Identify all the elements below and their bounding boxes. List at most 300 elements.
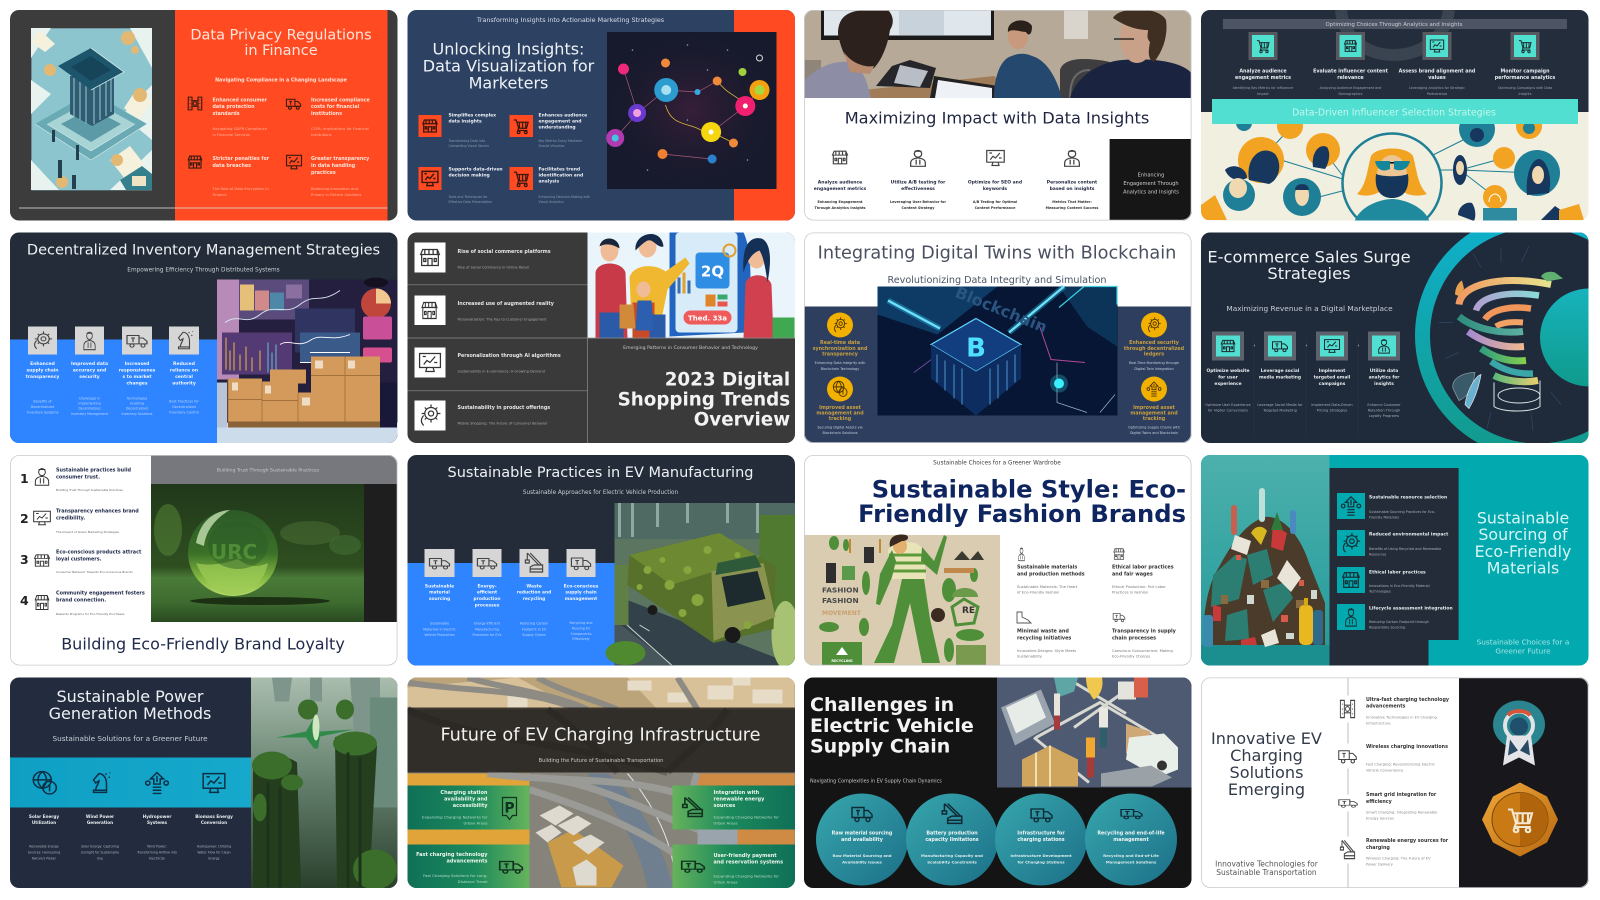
illustration: blockchain cube: B <box>966 334 986 364</box>
item: materials: Sustainable Materials: The Heart <box>1017 585 1078 589</box>
item: solar: Sources: Harnessing <box>28 850 60 854</box>
item: supply chain <box>1112 614 1177 658</box>
item: wireless: Vehicle Convenience <box>1366 768 1404 772</box>
item: waste reduction: reduction and <box>517 590 551 596</box>
item: lifecycle: Lifecycle assessment integration <box>1369 606 1453 612</box>
item: data-driven decision: Supports data-driven <box>448 166 503 172</box>
item: solar: Utilization <box>32 820 56 825</box>
title: Data-Driven Influencer Selection Strategies <box>1292 107 1496 118</box>
item: hydropower: Electricity <box>149 856 165 860</box>
item: infrastructure <box>995 794 1087 886</box>
item: energy efficient: processes <box>475 602 500 608</box>
item: wireless: Wireless charging innovations <box>1366 744 1448 750</box>
item 1: Sustainable practices build <box>56 468 131 474</box>
illustration: eco fashion: MOVEMENT <box>822 610 862 617</box>
item: responsiveness: s to market <box>122 374 152 380</box>
panel: blue band <box>10 758 251 808</box>
item: recycling: Recycling and end-of-life <box>1097 830 1165 836</box>
card: Data Privacy Regulations in Finance <box>10 10 398 220</box>
illustration: isometric bank <box>31 28 152 190</box>
item: smart grid: Smart Charging: Integrating Renewable <box>1366 810 1438 814</box>
item: energy efficient <box>472 549 502 637</box>
item: analyze: Enhancing Engagement <box>817 200 863 204</box>
item: asset management right: tracking <box>1143 416 1166 422</box>
item: material sourcing: sourcing <box>429 596 450 602</box>
item: trends: Facilitates trend <box>538 166 580 172</box>
item: reliance: reliance on <box>170 368 198 374</box>
item: audience engagement: understanding <box>538 125 576 131</box>
row dividers <box>408 285 795 391</box>
card border <box>804 455 1191 665</box>
title: Data Privacy Regulations <box>190 28 372 44</box>
item: environmental impact: Resources <box>1369 552 1387 556</box>
item: trends <box>510 166 590 204</box>
item 3: 3 <box>20 552 29 567</box>
item: recycling: Management Solutions <box>1106 860 1157 864</box>
title: Supply Chain <box>810 736 950 758</box>
item: payment <box>672 844 795 888</box>
item: A/B testing: Utilize A/B testing for <box>891 180 946 186</box>
item: SEO: Optimize for SEO and <box>968 180 1022 186</box>
item: social media: Leverage social <box>1261 368 1300 374</box>
item: renewable integration: Urban Areas <box>714 820 737 826</box>
panel: orange strip <box>734 10 795 220</box>
title: Maximizing Impact with Data Insights <box>845 108 1149 128</box>
item: compliance costs: CCPA: Implications for Financial <box>311 127 369 131</box>
item: biomass: Hydropower: Utilizing <box>197 844 231 848</box>
card: Future of EV Charging <box>408 678 795 888</box>
item: consumer data protection: Enhanced consumer <box>212 98 268 104</box>
item: A/B testing: Content Strategy <box>902 206 935 210</box>
item: smart grid: Energy Sources <box>1366 816 1394 820</box>
item: email campaigns: campaigns <box>1319 381 1346 387</box>
illustration: funnel <box>1439 246 1563 430</box>
illustration: eco fashion: RECYCLING <box>831 659 853 663</box>
item 1: Building Trust Through Sustainable Practices <box>56 488 123 492</box>
item: AI personalization: Personalization through AI algorithms <box>458 353 561 359</box>
item: renewable integration <box>672 786 795 830</box>
title: Electric Vehicle <box>810 715 974 737</box>
panel: navy <box>804 306 1192 443</box>
item: material sourcing: Sustainable <box>430 622 449 626</box>
item: labor: Technologies <box>1368 590 1391 594</box>
item: supply chain: Eco-Friendly Choices <box>1112 654 1150 658</box>
title: Sustainable Practices in EV Manufacturing <box>448 465 753 481</box>
item: content relevance: Analyzing Audience Engagement and <box>1320 86 1381 90</box>
item: reliance: Decentralized <box>172 405 196 409</box>
item 4: Community engagement fosters <box>56 590 145 596</box>
title: Strategies <box>1267 264 1351 283</box>
item: augmented reality: Personalization: The Key to Customer Engagement <box>458 318 547 322</box>
title: Emerging <box>1228 780 1305 799</box>
item: supply chain: Transparency in supply <box>1112 628 1177 634</box>
subtitle: Building the Future of Sustainable Transportation <box>539 758 663 764</box>
item: supply chain: chain processes <box>1112 636 1156 642</box>
subtitle: Optimizing Choices Through Analytics and Insights <box>1326 22 1463 28</box>
item: station availability: accessibility <box>453 803 488 809</box>
title: Innovative EV <box>1211 729 1322 748</box>
item: labor: Practices in Fashion <box>1112 590 1149 594</box>
title: Building Eco-Friendly Brand Loyalty <box>61 634 345 654</box>
item: simplifies: Transforming Data into <box>448 139 485 143</box>
item: accuracy <box>71 326 109 416</box>
item: waste: recycling initiatives <box>1017 636 1071 642</box>
dark title band <box>408 708 795 772</box>
title: Sustainable Style: Eco- <box>872 476 1186 504</box>
item: social media: media marketing <box>1259 374 1301 380</box>
item: A/B testing <box>890 150 946 210</box>
item: engagement metrics: Impact <box>1257 92 1269 96</box>
item: ultra-fast: Infrastructure <box>1366 722 1391 726</box>
item: optimize website: Optimize website <box>1206 368 1250 374</box>
item: payment: Expanding Charging Networks for <box>714 874 779 878</box>
item: personalize <box>1046 150 1098 210</box>
item: responsiveness: Decentralized <box>126 406 148 410</box>
title: Materials <box>1487 558 1559 578</box>
item: AI personalization <box>414 348 561 378</box>
title: Generation Methods <box>49 704 211 723</box>
subtitle: Building Trust Through Sustainable Practices <box>217 468 320 474</box>
item: responsiveness <box>119 326 156 416</box>
item: reliance: Best Practices for <box>169 400 199 404</box>
item: content relevance: Evaluate influencer content <box>1313 69 1389 75</box>
subtitle: Sustainable Solutions for a Greener Future <box>52 734 208 743</box>
illustration: eco fashion: FASHION <box>822 596 859 605</box>
icon: ribbon medal <box>1493 700 1545 766</box>
item: infrastructure: Infrastructure Development <box>1010 853 1072 858</box>
item: consumer data protection: Navigating GDPR Compliance <box>212 127 268 131</box>
item: analyze <box>814 151 867 210</box>
item: materials: Sustainable materials <box>1017 564 1077 570</box>
item: greater transparency: in data handling <box>311 163 356 169</box>
illustration: data network <box>606 32 776 189</box>
separators <box>1254 338 1358 438</box>
item: engagement metrics: Analyze audience <box>1239 69 1287 75</box>
item: renewable: Power Delivery <box>1366 862 1394 866</box>
item: email campaigns: Implement Data-Driven <box>1311 403 1353 407</box>
card: Innovative EV Charging Solutions <box>1201 678 1588 888</box>
item: data analytics: Utilize data <box>1370 368 1398 374</box>
item: optimize website: for user <box>1218 374 1239 380</box>
item 2: The Impact of Green Marketing Strategies <box>55 530 119 534</box>
item: station availability: Charging station <box>440 790 488 796</box>
item: sustainability: Sustainability in product offerings <box>458 405 550 411</box>
item: A/B testing: Leveraging User Behavior for <box>890 200 946 204</box>
subtitle: Navigating Complexities in EV Supply Chain Dynamics <box>810 778 942 784</box>
item: waste reduction: recycling <box>523 596 545 602</box>
item: stricter penalties: The Role of Data Encryption in <box>212 187 269 191</box>
item: renewable: Wireless Charging: The Future of EV <box>1366 856 1431 860</box>
item: wireless: Fast Charging: Revolutionizing Electric <box>1366 762 1435 766</box>
title: Challenges in <box>810 694 954 716</box>
item: waste reduction: Supply Chains <box>522 633 546 637</box>
subtitle: Sustainable Transportation <box>1216 868 1317 877</box>
item: social media: Targeted Marketing <box>1262 408 1297 412</box>
callout text: Enhancing <box>1138 172 1164 178</box>
item: labor: Ethical Production: Fair Labor <box>1112 585 1166 589</box>
card: Sustainable Power Generation <box>10 678 398 890</box>
item: real-time data: Enhancing Data Integrity with <box>815 361 865 365</box>
title: 2023 Digital <box>665 370 790 390</box>
item: material sourcing: Materials in Electric <box>423 628 456 632</box>
subtitle: Greener Future <box>1495 646 1551 656</box>
subtitle: Transforming Insights into Actionable Marketing Strategies <box>476 16 665 24</box>
item: trends: identification and <box>538 172 583 178</box>
item: station availability: Expanding Charging Networks for <box>422 814 488 820</box>
card: Sustainable Practices in EV Manufacturing <box>408 455 800 669</box>
item: wireless <box>1336 744 1448 772</box>
illustration: family shopping: Thed. 33a <box>688 314 727 322</box>
item: environmental impact: Reduced environmental impact <box>1369 532 1449 538</box>
item: campaign analytics <box>1495 32 1555 96</box>
item: biomass: Energy <box>208 856 220 860</box>
item: stricter penalties <box>188 156 270 197</box>
item: greater transparency: Balancing Innovation and <box>311 187 358 191</box>
decorative-line label: footer rule <box>19 208 388 209</box>
item: smart grid: efficiency <box>1366 799 1393 805</box>
item: social commerce: Rise of social commerce platforms <box>458 249 551 255</box>
item: engagement metrics <box>1233 32 1294 96</box>
item: supply chain: management <box>565 596 597 602</box>
illustration: isometric logistics <box>997 678 1192 788</box>
item: trends: analysis <box>538 178 559 184</box>
item: transparency: transparency <box>26 374 59 380</box>
item: enhanced security: Real-Time Monitoring through <box>1129 361 1179 365</box>
item: payment: Urban Areas <box>714 880 737 884</box>
panel: dark list <box>1330 468 1459 666</box>
vertical line <box>1347 678 1349 888</box>
subtitle: Innovative Technologies for <box>1215 860 1319 868</box>
item: biomass: Water Flow for Clean <box>197 850 231 854</box>
item: waste <box>1017 612 1076 658</box>
item: transparency: supply chain <box>26 368 59 374</box>
card: E-commerce Sales Surge <box>1201 220 1600 451</box>
item: A/B testing: effectiveness <box>901 186 935 192</box>
card: Decentralized Inventory Management <box>10 232 398 443</box>
title: Charging <box>1230 746 1303 765</box>
title: Shopping Trends <box>618 390 790 410</box>
item: trends: Enhancing Decision-Making with <box>538 195 590 199</box>
item: fast charging: Distance Travel <box>458 879 488 884</box>
item: trends: Visual Analytics <box>538 200 564 204</box>
item 4: Rewards Programs for Eco-Friendly Purchases <box>56 612 125 616</box>
photo: highways aerial <box>408 678 795 888</box>
item: wind <box>81 773 119 860</box>
item 2: Transparency enhances brand <box>56 508 139 514</box>
subtitle: Maximizing Revenue in a Digital Marketplace <box>1226 304 1393 313</box>
item: hydropower: Systems <box>147 820 167 825</box>
item: content relevance <box>1313 32 1389 96</box>
item: optimize website: Optimize User Experience <box>1205 403 1251 407</box>
item: optimize website: experience <box>1214 381 1242 387</box>
item: responsiveness: responsivenes <box>119 368 156 374</box>
photo: forest city <box>251 678 398 890</box>
item: data analytics <box>1367 332 1401 418</box>
item: hydropower: Transforming Airflow into <box>136 850 177 854</box>
item: SEO: A/B Testing for Optimal <box>973 200 1017 204</box>
ring arc <box>1422 220 1600 451</box>
item: transparency: Decentralized <box>31 405 54 409</box>
subtitle: Revolutionizing Data Integrity and Simulation <box>887 275 1107 286</box>
item: engagement metrics: Identifying Key Metrics for Influencer <box>1233 86 1294 90</box>
item: greater transparency: Privacy in Fintech Solutions <box>311 193 362 197</box>
item: asset management left: Securing Digital Assets via <box>817 426 863 430</box>
item: energy efficient: Processes for EVs <box>473 633 502 637</box>
item: email campaigns <box>1311 332 1353 412</box>
item: resource selection: Sustainable Sourcing Practices for Eco- <box>1369 510 1436 514</box>
item: energy efficient: Manufacturing <box>475 628 499 632</box>
item: supply chain: Eco-conscious <box>564 584 599 590</box>
item: hydropower: Wind Power: <box>147 844 167 848</box>
item: renewable integration: Expanding Charging Networks for <box>714 814 779 820</box>
card: Sustainable Style <box>804 455 1192 666</box>
item: waste: Innovative Designs: Style Meets <box>1017 649 1076 653</box>
card: Unlocking Insights <box>408 10 795 220</box>
item 3: Consumer Behavior Towards Eco-Conscious Brands <box>56 570 133 574</box>
item 2 <box>20 508 139 534</box>
item: responsiveness: Increased <box>125 361 149 367</box>
item: reliance: Reduced <box>173 361 195 367</box>
item: data analytics: Enhance Customer <box>1367 403 1401 407</box>
item 4: 4 <box>20 593 29 608</box>
callout text: Analytics and Insights <box>1123 190 1179 196</box>
item: fast charging: Fast charging technology <box>416 852 488 858</box>
item: enhanced security: ledgers <box>1144 352 1164 358</box>
photo: green van <box>606 503 800 669</box>
item: supply chain: Recycling and <box>569 621 593 625</box>
item: supply chain: Conscious Consumerism: Making <box>1112 649 1173 653</box>
item: consumer data protection: standards <box>212 111 240 117</box>
item: brand alignment: Partnerships <box>1427 92 1448 96</box>
item: supply chain: Reusing EV <box>572 626 591 630</box>
item: asset management right: management and <box>1130 410 1178 416</box>
item: environmental impact <box>1337 530 1449 556</box>
item: waste: Sustainability <box>1017 654 1043 658</box>
item: ultra-fast: advancements <box>1366 704 1406 710</box>
top bar <box>151 455 398 484</box>
illustration: family shopping: 2Q <box>701 262 724 280</box>
item: asset management left: tracking <box>829 416 852 422</box>
card: Data-Driven Influencer Selection <box>1201 10 1588 232</box>
panel: dark header <box>1201 10 1588 112</box>
subtitle: Sustainable Approaches for Electric Vehicle Production <box>523 490 679 496</box>
item: brand alignment: Leveraging Analytics for Strategic <box>1409 86 1465 90</box>
item: asset management left: Improved asset <box>819 405 862 411</box>
item: energy efficient: Energy-Efficient <box>474 622 501 626</box>
item: compliance costs <box>286 98 370 137</box>
item 1: consumer trust. <box>56 474 100 480</box>
item: data analytics: analytics for <box>1369 374 1400 380</box>
item: campaign analytics: Insights <box>1519 92 1532 96</box>
item: solar: Renewable Energy <box>29 844 59 848</box>
card border <box>10 455 397 665</box>
item: material sourcing: Sustainable <box>425 584 454 590</box>
item: accuracy: Improved data <box>71 361 108 367</box>
item: reliance: authority <box>172 380 196 386</box>
item: simplifies: data insights <box>448 119 482 125</box>
item: battery capacity <box>906 794 998 886</box>
panel: orange content <box>175 10 388 220</box>
item: resource selection <box>1337 493 1447 520</box>
item: material sourcing: material <box>429 590 450 596</box>
item: biomass: Conversion <box>201 820 227 825</box>
item: resource selection: Friendly Materials <box>1369 516 1399 520</box>
item: ultra-fast <box>1336 696 1450 726</box>
item: payment: and reservation systems <box>714 860 783 866</box>
subtitle: Sustainable Choices for a Greener Wardrobe <box>933 461 1061 467</box>
title: Sustainable <box>1477 508 1569 528</box>
title: Sustainable Power <box>56 687 204 706</box>
item: station availability: Urban Areas <box>464 820 488 826</box>
item: accuracy: Inventory Management <box>71 412 109 416</box>
decoration ring <box>1341 10 1449 55</box>
item: social commerce <box>414 242 551 272</box>
item: battery capacity: Battery production <box>926 830 978 836</box>
item: simplifies: Compelling Visual Stories <box>448 144 489 148</box>
item: energy efficient: production <box>474 596 500 602</box>
item: raw materials: Availability Issues <box>842 860 883 864</box>
illustration: eco fashion <box>804 534 1000 666</box>
card border <box>804 10 1191 220</box>
item: raw materials: and availability <box>841 837 884 843</box>
item: accuracy: Implementing <box>78 402 101 406</box>
item: brand alignment <box>1399 32 1476 96</box>
title: Friendly Fashion Brands <box>858 500 1186 528</box>
item: audience engagement: Enhances audience <box>538 113 587 119</box>
item: asset management left: management and <box>816 410 864 416</box>
item: waste reduction: Footprint in EV <box>522 628 547 632</box>
icon: gold cart badge <box>1482 782 1558 856</box>
item: renewable: charging <box>1366 845 1390 851</box>
item: data analytics: insights <box>1374 381 1394 387</box>
item: social media <box>1257 332 1303 412</box>
item: reliance <box>169 326 199 414</box>
title: Integrating Digital Twins with Blockchain <box>818 244 1176 264</box>
item: transparency <box>26 326 59 414</box>
item: smart grid <box>1336 792 1438 820</box>
title: Data Visualization for <box>423 56 595 76</box>
item: stricter penalties: Stricter penalties for <box>212 156 270 162</box>
item: labor: Innovations in Eco-Friendly Material <box>1369 584 1430 588</box>
illustration: eco fashion: FASHION <box>822 586 859 594</box>
item: augmented reality <box>414 296 555 325</box>
item: personalize: based on insights <box>1050 186 1095 192</box>
item: waste reduction: Waste <box>526 584 542 590</box>
item: renewable: Renewable energy sources for <box>1366 838 1449 844</box>
item: SEO: keywords <box>983 186 1007 192</box>
card: 2023 Digital Shopping Trends <box>408 232 795 443</box>
item: supply chain: Effectively <box>572 637 590 641</box>
item: AI personalization: Sustainability in E-commerce: A Growing Demand <box>458 370 545 374</box>
item: solar: Solar Energy <box>29 814 59 819</box>
item: consumer data protection: in Financial Services <box>212 133 250 137</box>
item: supply chain <box>564 549 599 641</box>
item: data-driven decision: Effective Data Presentation <box>448 200 492 204</box>
item: sustainability: Mobile Shopping: The Future of Consumer Behavior <box>458 422 548 426</box>
card: Building Eco-Friendly Brand Loyalty <box>10 455 398 666</box>
item: asset management right: Digital Twins and Blockchain <box>1130 431 1178 435</box>
item: compliance costs: Increased compliance <box>311 98 370 104</box>
title: Solutions <box>1230 763 1303 782</box>
item: asset management right: Improved asset <box>1133 405 1176 411</box>
item: optimize website <box>1205 332 1251 412</box>
item: smart grid: Smart grid integration for <box>1366 792 1437 798</box>
teal band <box>1212 99 1578 124</box>
header bar <box>1223 19 1567 29</box>
photo: glass sphere <box>151 484 398 622</box>
item: ultra-fast: Ultra-fast charging technology <box>1366 697 1450 703</box>
item: infrastructure: charging stations <box>1017 837 1065 843</box>
